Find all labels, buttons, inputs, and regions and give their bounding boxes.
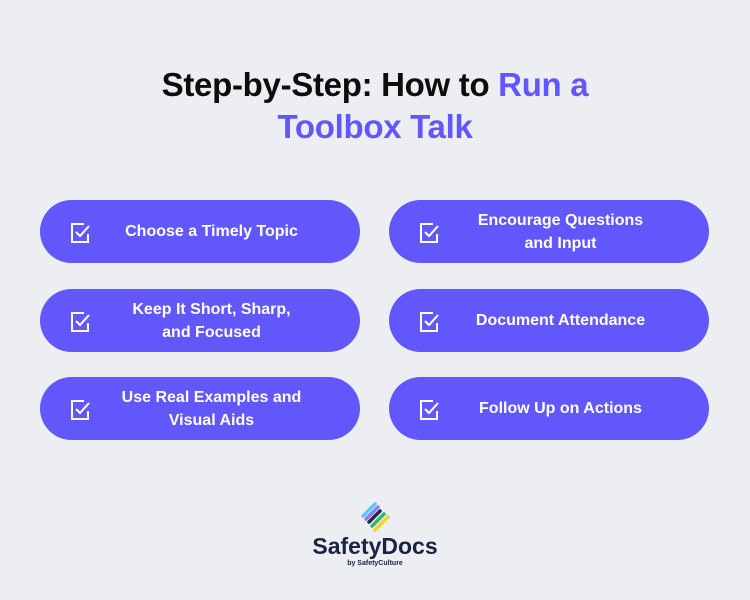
title: Toolbox Talk (277, 108, 472, 145)
pill: encourage questions (389, 200, 709, 263)
pill: real examples: Use Real Examples and (122, 388, 301, 406)
pill: choose topic (40, 200, 360, 263)
pill: follow up: Follow Up on Actions (479, 400, 642, 417)
pill: follow up (389, 377, 709, 440)
pill: real examples (40, 377, 360, 440)
pill: keep it short: and Focused (162, 324, 261, 340)
logo (312, 502, 438, 567)
title (162, 66, 589, 145)
pill: encourage questions: and Input (524, 234, 596, 252)
pill: keep it short: Keep It Short, Sharp, (132, 300, 291, 318)
pill: choose topic: Choose a Timely Topic (125, 223, 298, 240)
logo: by SafetyCulture (347, 560, 403, 567)
pill: encourage questions: Encourage Questions (478, 212, 643, 228)
pill: keep it short (40, 289, 360, 352)
pill: document attendance: Document Attendance (476, 312, 645, 329)
title: Step-by-Step: How to Run a (162, 66, 588, 103)
pill: real examples: Visual Aids (169, 412, 254, 428)
pill: document attendance (389, 289, 709, 352)
logo: SafetyDocs (312, 533, 438, 559)
